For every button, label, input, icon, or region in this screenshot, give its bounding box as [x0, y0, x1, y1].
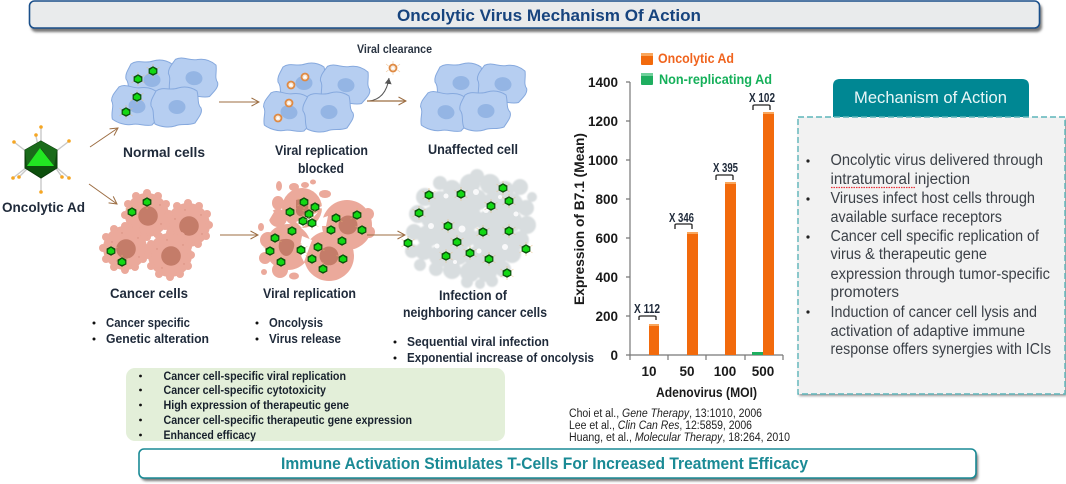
- bottom banner: [139, 449, 978, 481]
- icon: oncolytic adenovirus: [11, 125, 71, 194]
- bar chart: expression of B7.1: 1200: [588, 114, 618, 129]
- panel: mechanism of action list: [798, 117, 1066, 396]
- bar chart: expression of B7.1: 100: [714, 364, 736, 379]
- arrows from virus to cell groups: [89, 128, 118, 204]
- list: cancer cell traits: [92, 316, 209, 346]
- bottom banner: Immune Activation Stimulates T-Cells For Increased Treatment Efficacy: [281, 454, 808, 473]
- label: Oncolytic Ad: Oncolytic Ad: [2, 199, 85, 215]
- bar chart: expression of B7.1: X 395: [713, 161, 738, 175]
- title banner: Oncolytic Virus Mechanism Of Action: [397, 6, 701, 25]
- arrow: cancer to replication: [220, 234, 258, 236]
- panel: mechanism of action list: promoters: [830, 284, 899, 301]
- illustration: cancer cells with virus: [99, 189, 213, 281]
- bar chart: expression of B7.1: 0: [610, 348, 618, 363]
- bar chart: expression of B7.1: 200: [595, 309, 618, 324]
- bar chart: expression of B7.1: 1000: [588, 153, 618, 168]
- illustration: viral replication lysing cells: [258, 180, 375, 281]
- panel tab: mechanism of action: Mechanism of Action: [854, 88, 1007, 107]
- panel: green benefits list: Cancer cell-specific cytotoxicity: [164, 383, 326, 397]
- bar chart: expression of B7.1: 400: [595, 270, 618, 285]
- panel tab: mechanism of action: [833, 79, 1029, 117]
- panel: green benefits list: [126, 368, 505, 442]
- bar chart: expression of B7.1: 1400: [588, 75, 618, 90]
- bar chart: expression of B7.1: Expression of B7.1 (Mean): [572, 133, 587, 305]
- bar chart: expression of B7.1: [572, 75, 783, 400]
- bar chart: expression of B7.1: 500: [752, 364, 774, 379]
- icon: cleared virus: [386, 61, 400, 75]
- label: unaffected cell: Unaffected cell: [428, 141, 518, 157]
- list: viral replication outcomes: [256, 316, 341, 346]
- bar chart: expression of B7.1: Adenovirus (MOI): [656, 385, 757, 400]
- panel: mechanism of action list: intratumoral injection: [830, 171, 970, 188]
- panel: mechanism of action list: Oncolytic virus delivered through: [830, 152, 1043, 169]
- label: viral replication blocked: Viral replication: [275, 142, 368, 158]
- label: infection of neighboring cancer cells: Infection of: [439, 287, 507, 303]
- label: infection of neighboring cancer cells: [403, 287, 547, 320]
- bar chart: expression of B7.1: 50: [679, 364, 695, 379]
- panel: mechanism of action list: Cancer cell specific replication of: [830, 228, 1040, 245]
- arrow: replication to infection: [367, 234, 405, 236]
- list: viral replication outcomes: Virus release: [269, 332, 341, 346]
- references: Choi et al., Gene Therapy, 13:1010, 2006: [569, 408, 762, 420]
- illustration: debris and virus infecting neighbours: [402, 171, 535, 287]
- label: viral replication blocked: [275, 142, 368, 176]
- references: Lee et al., Clin Can Res, 12:5859, 2006: [569, 420, 752, 432]
- arrow: blocked to unaffected: [367, 100, 406, 102]
- bar chart: expression of B7.1: 600: [595, 231, 618, 246]
- title banner: [30, 1, 1042, 32]
- list: cancer cell traits: Cancer specific: [106, 316, 190, 330]
- list: infection outcomes: Exponential increase of oncolysis: [407, 351, 594, 365]
- panel: green benefits list: Cancer cell-specific viral replication: [164, 369, 346, 383]
- bar chart: expression of B7.1: 10: [641, 364, 657, 379]
- list: infection outcomes: Sequential viral infection: [407, 335, 549, 349]
- label: infection of neighboring cancer cells: neighboring cancer cells: [403, 304, 547, 320]
- bar chart: expression of B7.1: X 112: [634, 302, 660, 316]
- panel: mechanism of action list: response offers synergies with ICIs: [830, 341, 1051, 358]
- list: infection outcomes: [394, 335, 594, 365]
- list: cancer cell traits: Genetic alteration: [106, 332, 209, 346]
- illustration: normal cells with virus: [108, 55, 221, 130]
- legend: [641, 51, 772, 87]
- references: Huang, et al., Molecular Therapy, 18:264, 2010: [569, 432, 790, 444]
- panel: mechanism of action list: Viruses infect host cells through: [830, 190, 1035, 207]
- panel: green benefits list: Cancer cell-specific therapeutic gene expression: [164, 413, 412, 427]
- references: [569, 408, 790, 444]
- label: cancer cells: Cancer cells: [110, 285, 188, 301]
- panel: mechanism of action list: Induction of cancer cell lysis and: [830, 304, 1037, 321]
- bar chart: expression of B7.1: 800: [595, 192, 618, 207]
- panel: mechanism of action list: activation of adaptive immune: [830, 323, 1025, 340]
- label: normal cells: Normal cells: [123, 144, 205, 160]
- legend: Non-replicating Ad: [659, 72, 772, 87]
- arrow: normal to blocked: [219, 101, 259, 103]
- illustration: unaffected cells: [417, 61, 530, 136]
- panel: green benefits list: High expression of therapeutic gene: [164, 398, 349, 412]
- illustration: viral replication blocked: [260, 62, 373, 136]
- arrow: viral clearance curve: [369, 78, 389, 101]
- panel: mechanism of action list: virus & therapeutic gene: [830, 246, 987, 263]
- list: viral replication outcomes: Oncolysis: [269, 316, 323, 330]
- label: viral replication blocked: blocked: [298, 160, 344, 176]
- panel: mechanism of action list: expression through tumor-specific: [830, 266, 1050, 283]
- bar chart: expression of B7.1: X 346: [669, 211, 694, 225]
- label: viral replication: Viral replication: [263, 285, 356, 301]
- legend: Oncolytic Ad: [658, 51, 734, 66]
- panel: mechanism of action list: available surface receptors: [830, 209, 1002, 226]
- panel: green benefits list: Enhanced efficacy: [164, 428, 256, 442]
- label: viral clearance: Viral clearance: [357, 44, 432, 56]
- bar chart: expression of B7.1: X 102: [749, 91, 775, 105]
